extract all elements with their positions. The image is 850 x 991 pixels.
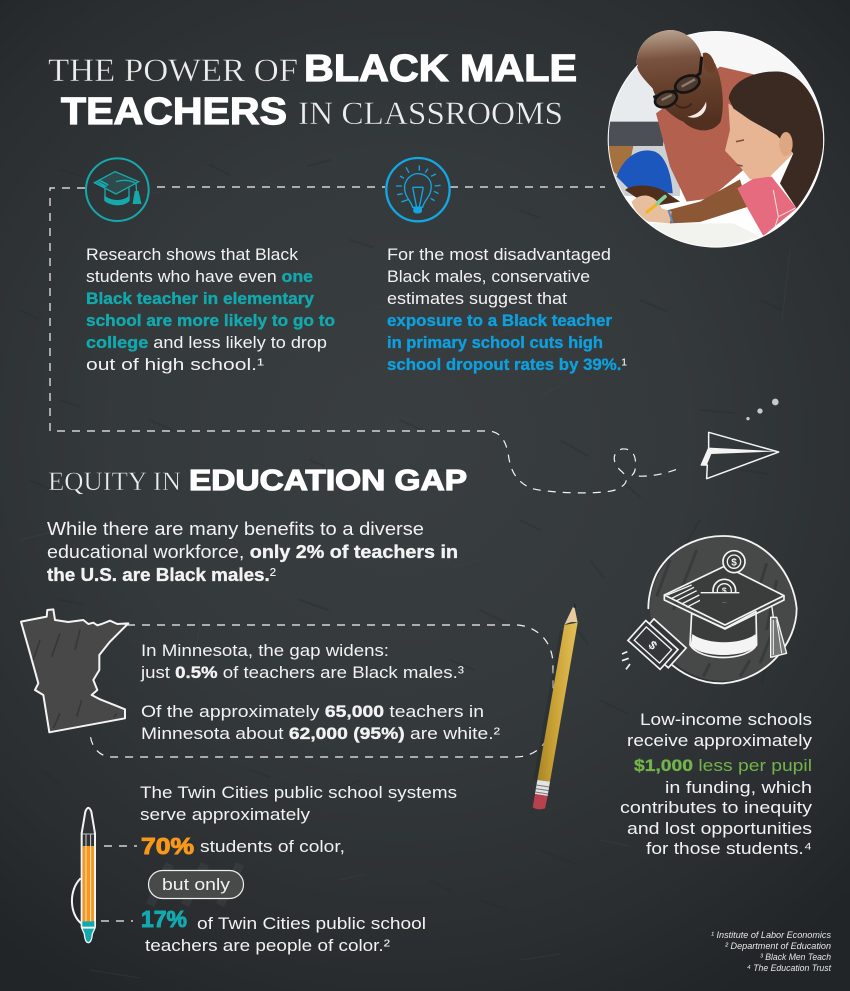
text: research on Black teachers: school are more likely to go to [86,312,335,330]
text: low-income school funding: for those students.⁴ [646,840,812,858]
title [48,48,577,133]
text: Twin Cities students of color: serve approximately [140,806,311,824]
text: exposure to a Black teacher: estimates suggest that [387,290,567,308]
text: Twin Cities students of color [140,784,457,859]
dashed outline: Minnesota callout [90,625,553,757]
text: research on Black teachers: college and less likely to drop [86,334,327,352]
text: only 2% of teachers are Black males: educational workforce, only 2% of teachers in [47,541,458,562]
text: exposure to a Black teacher: Black males, conservative [387,268,590,286]
heading: equity in education gap: EDUCATION GAP [189,465,467,497]
leader line: 70 percent [104,845,137,847]
text: Twin Cities students of color: The Twin Cities public school systems [140,784,457,802]
footnotes: ⁴ The Education Trust [747,963,831,973]
footnotes: ² Department of Education [725,941,831,951]
icon: graduation cap with money [622,536,797,683]
dashed path: top panel outline and flight of the paper plane [50,187,680,493]
text: exposure to a Black teacher [387,246,628,374]
heading: equity in education gap: EQUITY IN [48,467,181,496]
text: low-income school funding: in funding, which [665,779,812,797]
text: Minnesota statistics: Of the approximately 65,000 teachers in [141,703,484,721]
text: exposure to a Black teacher: exposure to a Black teacher [387,312,613,330]
icon: orange pen [72,808,95,943]
text: Twin Cities teachers of color [141,906,426,955]
text: only 2% of teachers are Black males: While there are many benefits to a diverse [47,518,424,539]
icon: graduation cap with money: $ [722,585,727,595]
text: Twin Cities teachers of color: 17% [141,906,187,932]
text: Minnesota statistics [140,642,501,743]
text: only 2% of teachers are Black males [47,518,458,585]
text: Twin Cities teachers of color: of Twin Cities public school [197,915,426,933]
text: Minnesota statistics: just 0.5% of teachers are Black males.³ [140,664,465,682]
footnotes: ³ Black Men Teach [760,952,831,962]
pill: but only: but only [162,876,231,894]
text: low-income school funding [620,711,813,858]
text: Minnesota statistics: Minnesota about 62,000 (95%) are white.² [141,725,501,743]
text: research on Black teachers: Black teacher in elementary [86,290,315,308]
text: low-income school funding: Low-income schools [640,711,812,729]
text: Minnesota statistics: In Minnesota, the gap widens: [141,642,389,660]
icon: graduation cap [86,158,149,221]
title: BLACK MALE [304,48,577,90]
icon: graduation cap with money: $ [731,557,737,568]
icon: paper plane with dots [701,399,779,479]
text: exposure to a Black teacher: in primary school cuts high [387,334,603,352]
photo: teacher and student [607,27,827,250]
text: research on Black teachers: students who have even one [86,268,313,286]
text: research on Black teachers [86,246,335,374]
footnotes: ¹ Institute of Labor Economics [711,930,831,940]
text: Twin Cities students of color: 70% [141,833,194,859]
heading: equity in education gap [48,465,467,497]
text: Twin Cities students of color: students of color, [200,838,345,856]
footnotes [711,930,831,973]
text: low-income school funding: contributes to inequity [620,799,813,817]
leader line: 17 percent [101,920,133,922]
text: research on Black teachers: out of high school.¹ [86,356,265,374]
text: low-income school funding: and lost opportunities [627,820,812,838]
text: only 2% of teachers are Black males: the U.S. are Black males.² [47,564,276,585]
title: IN CLASSROOMS [298,96,563,132]
icon: yellow pencil [533,603,578,809]
icon: light bulb [386,158,450,221]
text: research on Black teachers: Research shows that Black [86,246,299,264]
title: TEACHERS [61,91,287,133]
text: low-income school funding: $1,000 less per pupil [634,757,812,775]
pill: but only [148,864,244,905]
text: exposure to a Black teacher: school dropout rates by 39%. ¹ [387,356,628,374]
text: exposure to a Black teacher: For the most disadvantaged [387,246,611,264]
title: THE POWER OF [48,53,298,89]
text: Twin Cities teachers of color: teachers are people of color.² [145,937,391,955]
text: low-income school funding: receive approximately [627,732,813,750]
icon: graduation cap with money: $ [646,638,660,653]
icon: map of Minnesota [21,609,128,732]
